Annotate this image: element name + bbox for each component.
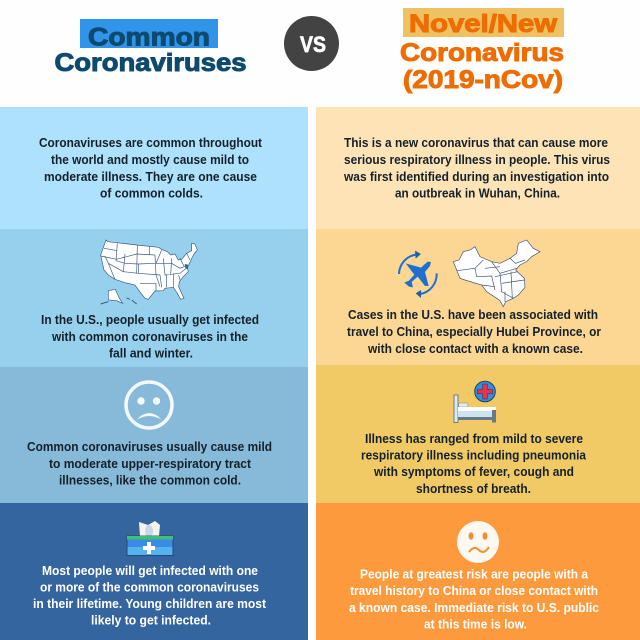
panel: common row 2: with common coronaviruses in the [51,330,248,344]
vs badge: VS [300,32,326,57]
panel: common row 2: In the U.S., people usually get infected [41,313,259,327]
panel: novel row 4 [316,503,640,640]
panel: novel row 1: an outbreak in Wuhan, China. [395,186,560,200]
panel: novel row 3: with symptoms of fever, cough and [373,465,574,479]
panel: novel row 4: People at greatest risk are people with a [360,568,589,582]
icon: plane with circular arrows [399,251,437,298]
panel: common row 4: or more of the common coronaviruses [40,580,259,594]
panel: novel row 3: respiratory illness including pneumonia [361,448,587,462]
panel: common row 1: moderate illness. They are one cause [44,170,257,184]
heading: common coronaviruses: Common [88,24,210,52]
panel: novel row 4: a known case. Immediate risk to U.S. public [349,601,599,615]
panel: novel row 3: Illness has ranged from mild to severe [365,432,583,446]
panel: common row 3: Common coronaviruses usually cause mild [27,440,272,454]
panel: novel row 1 [316,107,640,229]
panel: novel row 1: serious respiratory illness in people. This virus [344,153,610,167]
panel: novel row 2 [316,229,640,365]
heading: common coronaviruses [54,19,247,77]
heading: novel coronavirus [400,8,564,94]
panel: common row 1 [0,107,308,229]
panel: common row 3: illnesses, like the common cold. [59,474,241,488]
panel: common row 3: to moderate upper-respiratory tract [49,457,252,471]
panel: common row 1: Coronaviruses are common throughout [39,136,263,150]
icon: uneasy face [457,521,499,563]
icon: hospital bed [454,381,496,422]
panel: novel row 3 [316,365,640,503]
vs badge [284,16,339,71]
heading: common coronaviruses: Coronaviruses [54,49,247,77]
heading: novel coronavirus: Novel/New [409,10,558,38]
panel: common row 4: likely to get infected. [91,614,211,628]
panel: common row 2 [0,229,308,367]
icon: US map [101,240,197,304]
panel: novel row 4: travel history to China or close contact with [350,584,598,598]
icon: sad face [126,382,172,428]
panel: common row 4 [0,503,308,640]
panel: common row 1: of common colds. [100,186,203,200]
panel: common row 2: fall and winter. [109,346,193,360]
panel: novel row 2: Cases in the U.S. have been associated with [348,308,598,322]
panel: common row 4: in their lifetime. Young children are most [33,597,267,611]
icon: China map [453,240,540,307]
panel: novel row 2: with close contact with a known case. [367,342,583,356]
heading: novel coronavirus: (2019-nCov) [403,66,563,94]
panel: common row 4: Most people will get infected with one [42,564,258,578]
panel: common row 3 [0,367,308,503]
panel: novel row 2: travel to China, especially Hubei Province, or [347,325,601,339]
heading: novel coronavirus: Coronavirus [400,39,564,67]
panel: novel row 1: was first identified during an investigation into [343,170,609,184]
icon: tissue box [127,521,173,556]
panel: novel row 1: This is a new coronavirus that can cause more [344,136,608,150]
panel: common row 1: the world and mostly cause mild to [51,153,249,167]
panel: novel row 4: at this time is low. [424,618,527,632]
panel: novel row 3: shortness of breath. [416,482,531,496]
